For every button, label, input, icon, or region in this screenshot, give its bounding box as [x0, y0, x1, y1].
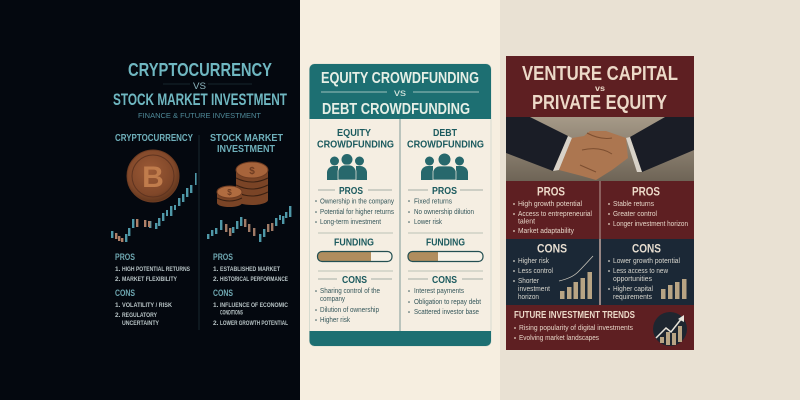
private equity pros: Stable returns: [613, 201, 654, 208]
venture pros: High growth potential: [518, 201, 582, 208]
header band: vs: [394, 88, 406, 99]
equity funding bar: FUNDING: [334, 236, 374, 248]
chart: venture growth bars: [559, 256, 593, 299]
equity funding bar: [318, 236, 392, 262]
cons panel: venture: [506, 239, 599, 305]
venture pros: [513, 186, 592, 235]
column heading: cryptocurrency: CRYPTOCURRENCY: [115, 133, 193, 144]
debt funding bar: [408, 236, 483, 262]
stock cons: [213, 288, 288, 327]
crypto pros: MARKET FLEXIBILITY: [122, 276, 178, 283]
stock pros: 2.: [213, 276, 219, 283]
icon: bitcoin coin: [127, 150, 179, 202]
cons panel: private equity: CONS: [632, 244, 661, 256]
crypto cons: [115, 288, 172, 327]
column heading: equity crowdfunding: EQUITY: [337, 127, 371, 139]
equity pros: Long-term investment: [320, 219, 381, 226]
private equity pros: [608, 186, 688, 228]
stock pros: [213, 252, 288, 283]
column heading: equity crowdfunding: CROWDFUNDING: [317, 138, 394, 150]
crypto cons: VOLATILITY / RISK: [122, 302, 172, 309]
icon: equity people: [327, 154, 367, 180]
cons panel: venture: Less control: [518, 268, 553, 275]
cons panel: venture: Shorter: [518, 278, 540, 285]
cons panel: private equity: Less access to new: [613, 268, 669, 275]
title block: [522, 63, 678, 114]
cons panel: private equity: requirements: [613, 294, 652, 301]
crypto cons: 2.: [115, 312, 121, 319]
crypto cons: 1.: [115, 302, 121, 309]
private equity pros: Longer investment horizon: [613, 221, 688, 228]
cons panel: venture: horizon: [518, 294, 539, 301]
future investment trends: FUTURE INVESTMENT TRENDS: [514, 310, 635, 321]
private equity pros: PROS: [632, 186, 660, 198]
title block: VENTURE CAPITAL: [522, 63, 678, 85]
crypto pros: [115, 252, 191, 283]
debt pros: [408, 185, 483, 226]
chart: private equity bars: [661, 279, 686, 299]
header band: DEBT CROWDFUNDING: [322, 101, 470, 118]
stock pros: PROS: [213, 252, 233, 262]
panel: equity vs debt crowdfunding: [300, 0, 500, 400]
stock cons: 1.: [213, 302, 219, 309]
debt cons: CONS: [432, 274, 457, 286]
crypto pros: PROS: [115, 252, 135, 262]
debt pros: PROS: [432, 185, 457, 197]
cons panel: venture: investment: [518, 286, 550, 293]
vs label: VS: [193, 81, 206, 91]
future investment trends: Evolving market landscapes: [519, 335, 599, 342]
debt pros: No ownership dilution: [414, 209, 474, 216]
debt cons: Interest payments: [414, 288, 464, 295]
equity cons: Higher risk: [320, 317, 350, 324]
crypto cons: REGULATORY: [122, 312, 158, 319]
title: cryptocurrency: CRYPTOCURRENCY: [128, 60, 272, 80]
cons panel: private equity: [601, 239, 694, 305]
cons panel: venture: Higher risk: [518, 258, 549, 265]
stock pros: HISTORICAL PERFORMANCE: [220, 276, 288, 283]
photo: handshake: [506, 117, 694, 181]
venture pros: PROS: [537, 186, 565, 198]
equity pros: [315, 185, 394, 226]
crypto pros: 2.: [115, 276, 121, 283]
venture pros: talent: [518, 218, 535, 226]
column heading: stock market investment: [210, 133, 283, 155]
icon: growth arrow circle: [653, 312, 687, 346]
venture pros: Access to entrepreneurial: [518, 211, 592, 218]
icon: coin stacks: $: [227, 188, 232, 197]
cons panel: private equity: opportunities: [613, 276, 652, 283]
crypto pros: 1.: [115, 266, 121, 273]
stock pros: ESTABLISHED MARKET: [220, 266, 280, 273]
equity pros: Potential for higher returns: [320, 209, 394, 216]
icon: coin stacks: [217, 162, 268, 207]
column heading: stock market investment: INVESTMENT: [217, 144, 275, 155]
panel: cryptocurrency vs stock market: [0, 0, 300, 400]
icon: debt people: [421, 154, 468, 180]
stock cons: CONDITIONS: [220, 310, 243, 316]
venture pros: Market adaptability: [518, 228, 574, 235]
crypto pros: HIGH POTENTIAL RETURNS: [122, 266, 191, 273]
crypto cons: UNCERTAINTY: [122, 320, 160, 327]
column heading: equity crowdfunding: [317, 127, 394, 150]
equity pros: PROS: [339, 185, 363, 197]
header band: [310, 64, 491, 119]
crypto cons: CONS: [115, 288, 135, 298]
debt cons: Obligation to repay debt: [414, 299, 481, 306]
debt funding bar: FUNDING: [426, 236, 465, 248]
equity cons: Sharing control of the: [320, 288, 380, 295]
cons panel: private equity: Higher capital: [613, 286, 653, 293]
card background: [506, 56, 694, 350]
icon: bitcoin coin: B: [142, 161, 164, 194]
private equity pros: Greater control: [613, 211, 657, 218]
debt cons: [408, 274, 483, 316]
column heading: debt crowdfunding: CROWDFUNDING: [407, 138, 484, 150]
stock cons: LOWER GROWTH POTENTIAL: [220, 320, 288, 327]
column heading: debt crowdfunding: DEBT: [433, 127, 457, 139]
title block: PRIVATE EQUITY: [532, 92, 668, 114]
equity cons: company: [320, 296, 345, 303]
equity pros: Ownership in the company: [320, 198, 394, 206]
stock cons: INFLUENCE OF ECONOMIC: [220, 302, 288, 309]
subtitle: FINANCE & FUTURE INVESTMENT: [138, 111, 261, 120]
column heading: stock market investment: STOCK MARKET: [210, 133, 283, 144]
debt cons: Scattered investor base: [414, 309, 479, 316]
card body: [310, 64, 491, 346]
chart: stock candlesticks: [207, 206, 291, 242]
equity cons: Dilution of ownership: [320, 307, 379, 314]
chart: crypto candlesticks: [111, 173, 197, 242]
stock cons: CONS: [213, 288, 233, 298]
panel: venture capital vs private equity: [500, 0, 800, 400]
equity cons: CONS: [342, 274, 367, 286]
footer band: [310, 331, 491, 346]
debt pros: Fixed returns: [414, 198, 452, 206]
debt pros: Lower risk: [414, 219, 442, 226]
equity cons: [315, 274, 392, 324]
title: stock market investment: STOCK MARKET INVESTMENT: [113, 90, 287, 109]
header band: EQUITY CROWDFUNDING: [321, 70, 479, 87]
icon: coin stacks: $: [249, 166, 255, 177]
title block: vs: [595, 84, 606, 93]
future investment trends: [514, 310, 687, 346]
cons panel: private equity: Lower growth potential: [613, 258, 680, 265]
stock pros: 1.: [213, 266, 219, 273]
future investment trends: Rising popularity of digital investments: [519, 325, 633, 332]
cons panel: venture: CONS: [537, 244, 567, 256]
column heading: debt crowdfunding: [407, 127, 484, 150]
stock cons: 2.: [213, 320, 219, 327]
